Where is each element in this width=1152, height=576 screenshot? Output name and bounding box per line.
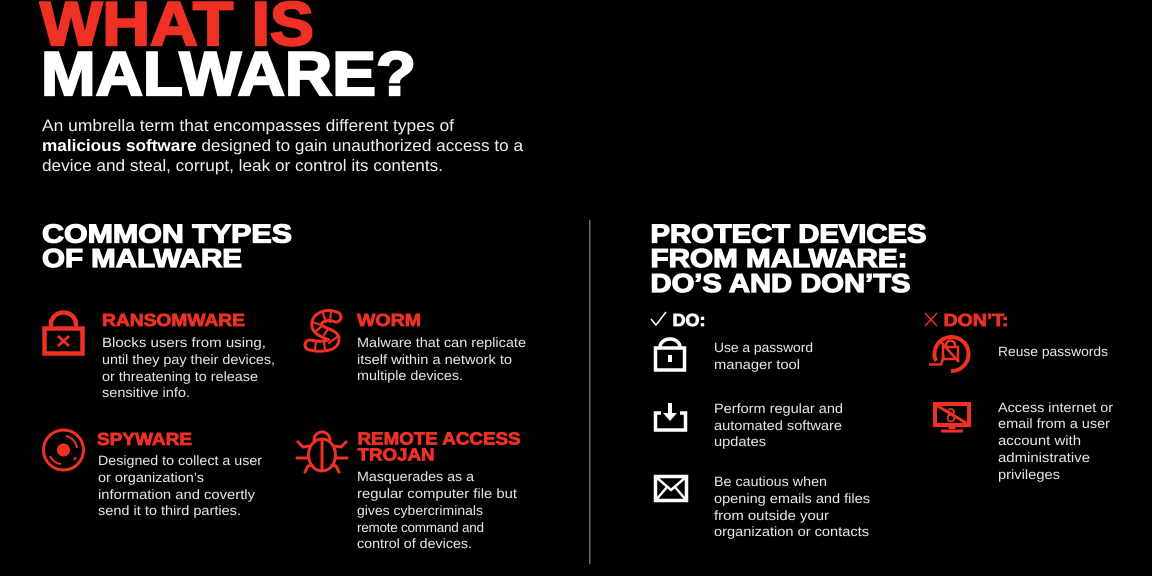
email caution text: opening emails and files xyxy=(714,491,870,506)
heading: common types of malware: OF MALWARE xyxy=(42,243,242,273)
intro text: malicious software designed to gain unauthorized access to a xyxy=(42,137,524,155)
icon: ransomware lock xyxy=(44,312,82,354)
icon: download updates xyxy=(656,403,686,430)
password manager text xyxy=(714,340,813,372)
heading: protect devices: FROM MALWARE: xyxy=(650,243,908,273)
spyware text xyxy=(97,429,263,518)
intro text xyxy=(42,117,524,175)
software updates text: Perform regular and xyxy=(714,401,843,416)
worm text: Malware that can replicate xyxy=(357,335,526,350)
ransomware text xyxy=(102,310,275,400)
heading: protect devices: DO’S AND DON’TS xyxy=(650,268,910,298)
email caution text xyxy=(714,474,870,539)
title: MALWARE? xyxy=(41,40,416,109)
intro text: device and steal, corrupt, leak or control its contents. xyxy=(42,157,443,175)
spyware text: or organization’s xyxy=(98,470,204,485)
password manager text: manager tool xyxy=(714,357,800,372)
heading: common types of malware xyxy=(42,218,292,273)
ransomware text: sensitive info. xyxy=(102,385,190,400)
admin access text: administrative xyxy=(998,450,1090,465)
worm text xyxy=(357,310,526,383)
admin access text: email from a user xyxy=(998,416,1111,431)
remote access trojan text: remote command and xyxy=(357,520,484,535)
ransomware text: RANSOMWARE xyxy=(102,310,245,330)
worm text: WORM xyxy=(357,310,421,330)
remote access trojan text: TROJAN xyxy=(358,444,434,464)
remote access trojan text: regular computer file but xyxy=(357,486,517,501)
ransomware text: or threatening to release xyxy=(102,369,258,384)
remote access trojan text: REMOTE ACCESS xyxy=(358,428,520,448)
worm text: itself within a network to xyxy=(357,352,512,367)
spyware text: SPYWARE xyxy=(97,429,192,449)
remote access trojan text: gives cybercriminals xyxy=(357,503,483,518)
remote access trojan text: control of devices. xyxy=(357,536,472,551)
software updates text xyxy=(714,401,843,449)
email caution text: organization or contacts xyxy=(714,524,869,539)
spyware text: Designed to collect a user xyxy=(98,453,263,468)
icon: password lock xyxy=(656,339,684,370)
do heading: DO: xyxy=(672,310,706,330)
title xyxy=(40,0,416,109)
ransomware text: Blocks users from using, xyxy=(102,335,266,350)
icon: admin monitor xyxy=(935,404,969,431)
don't heading: DON’T: xyxy=(944,310,1008,330)
password manager text: Use a password xyxy=(714,340,813,355)
software updates text: updates xyxy=(714,434,766,449)
spyware text: send it to third parties. xyxy=(98,503,241,518)
admin access text: Access internet or xyxy=(998,400,1114,415)
admin access text: privileges xyxy=(998,467,1060,482)
intro text: An umbrella term that encompasses different types of xyxy=(42,117,454,135)
icon: worm xyxy=(310,311,337,350)
icon: envelope xyxy=(656,476,686,500)
heading: common types of malware: COMMON TYPES xyxy=(42,218,292,248)
admin access text xyxy=(998,400,1114,482)
email caution text: from outside your xyxy=(714,508,830,523)
do heading xyxy=(651,310,706,330)
ransomware text: until they pay their devices, xyxy=(102,352,275,367)
heading: protect devices: PROTECT DEVICES xyxy=(650,218,926,248)
icon: spyware disc xyxy=(44,430,84,470)
email caution text: Be cautious when xyxy=(714,474,827,489)
icon: trojan bug xyxy=(297,432,347,472)
icon: reuse password xyxy=(929,337,968,371)
reuse passwords text: Reuse passwords xyxy=(998,344,1108,359)
don't heading xyxy=(925,310,1008,330)
software updates text: automated software xyxy=(714,418,842,433)
heading: protect devices xyxy=(650,218,926,298)
worm text: multiple devices. xyxy=(357,368,463,383)
remote access trojan text: Masquerades as a xyxy=(357,469,475,484)
spyware text: information and covertly xyxy=(98,487,255,502)
remote access trojan text xyxy=(357,428,520,551)
admin access text: account with xyxy=(998,433,1081,448)
